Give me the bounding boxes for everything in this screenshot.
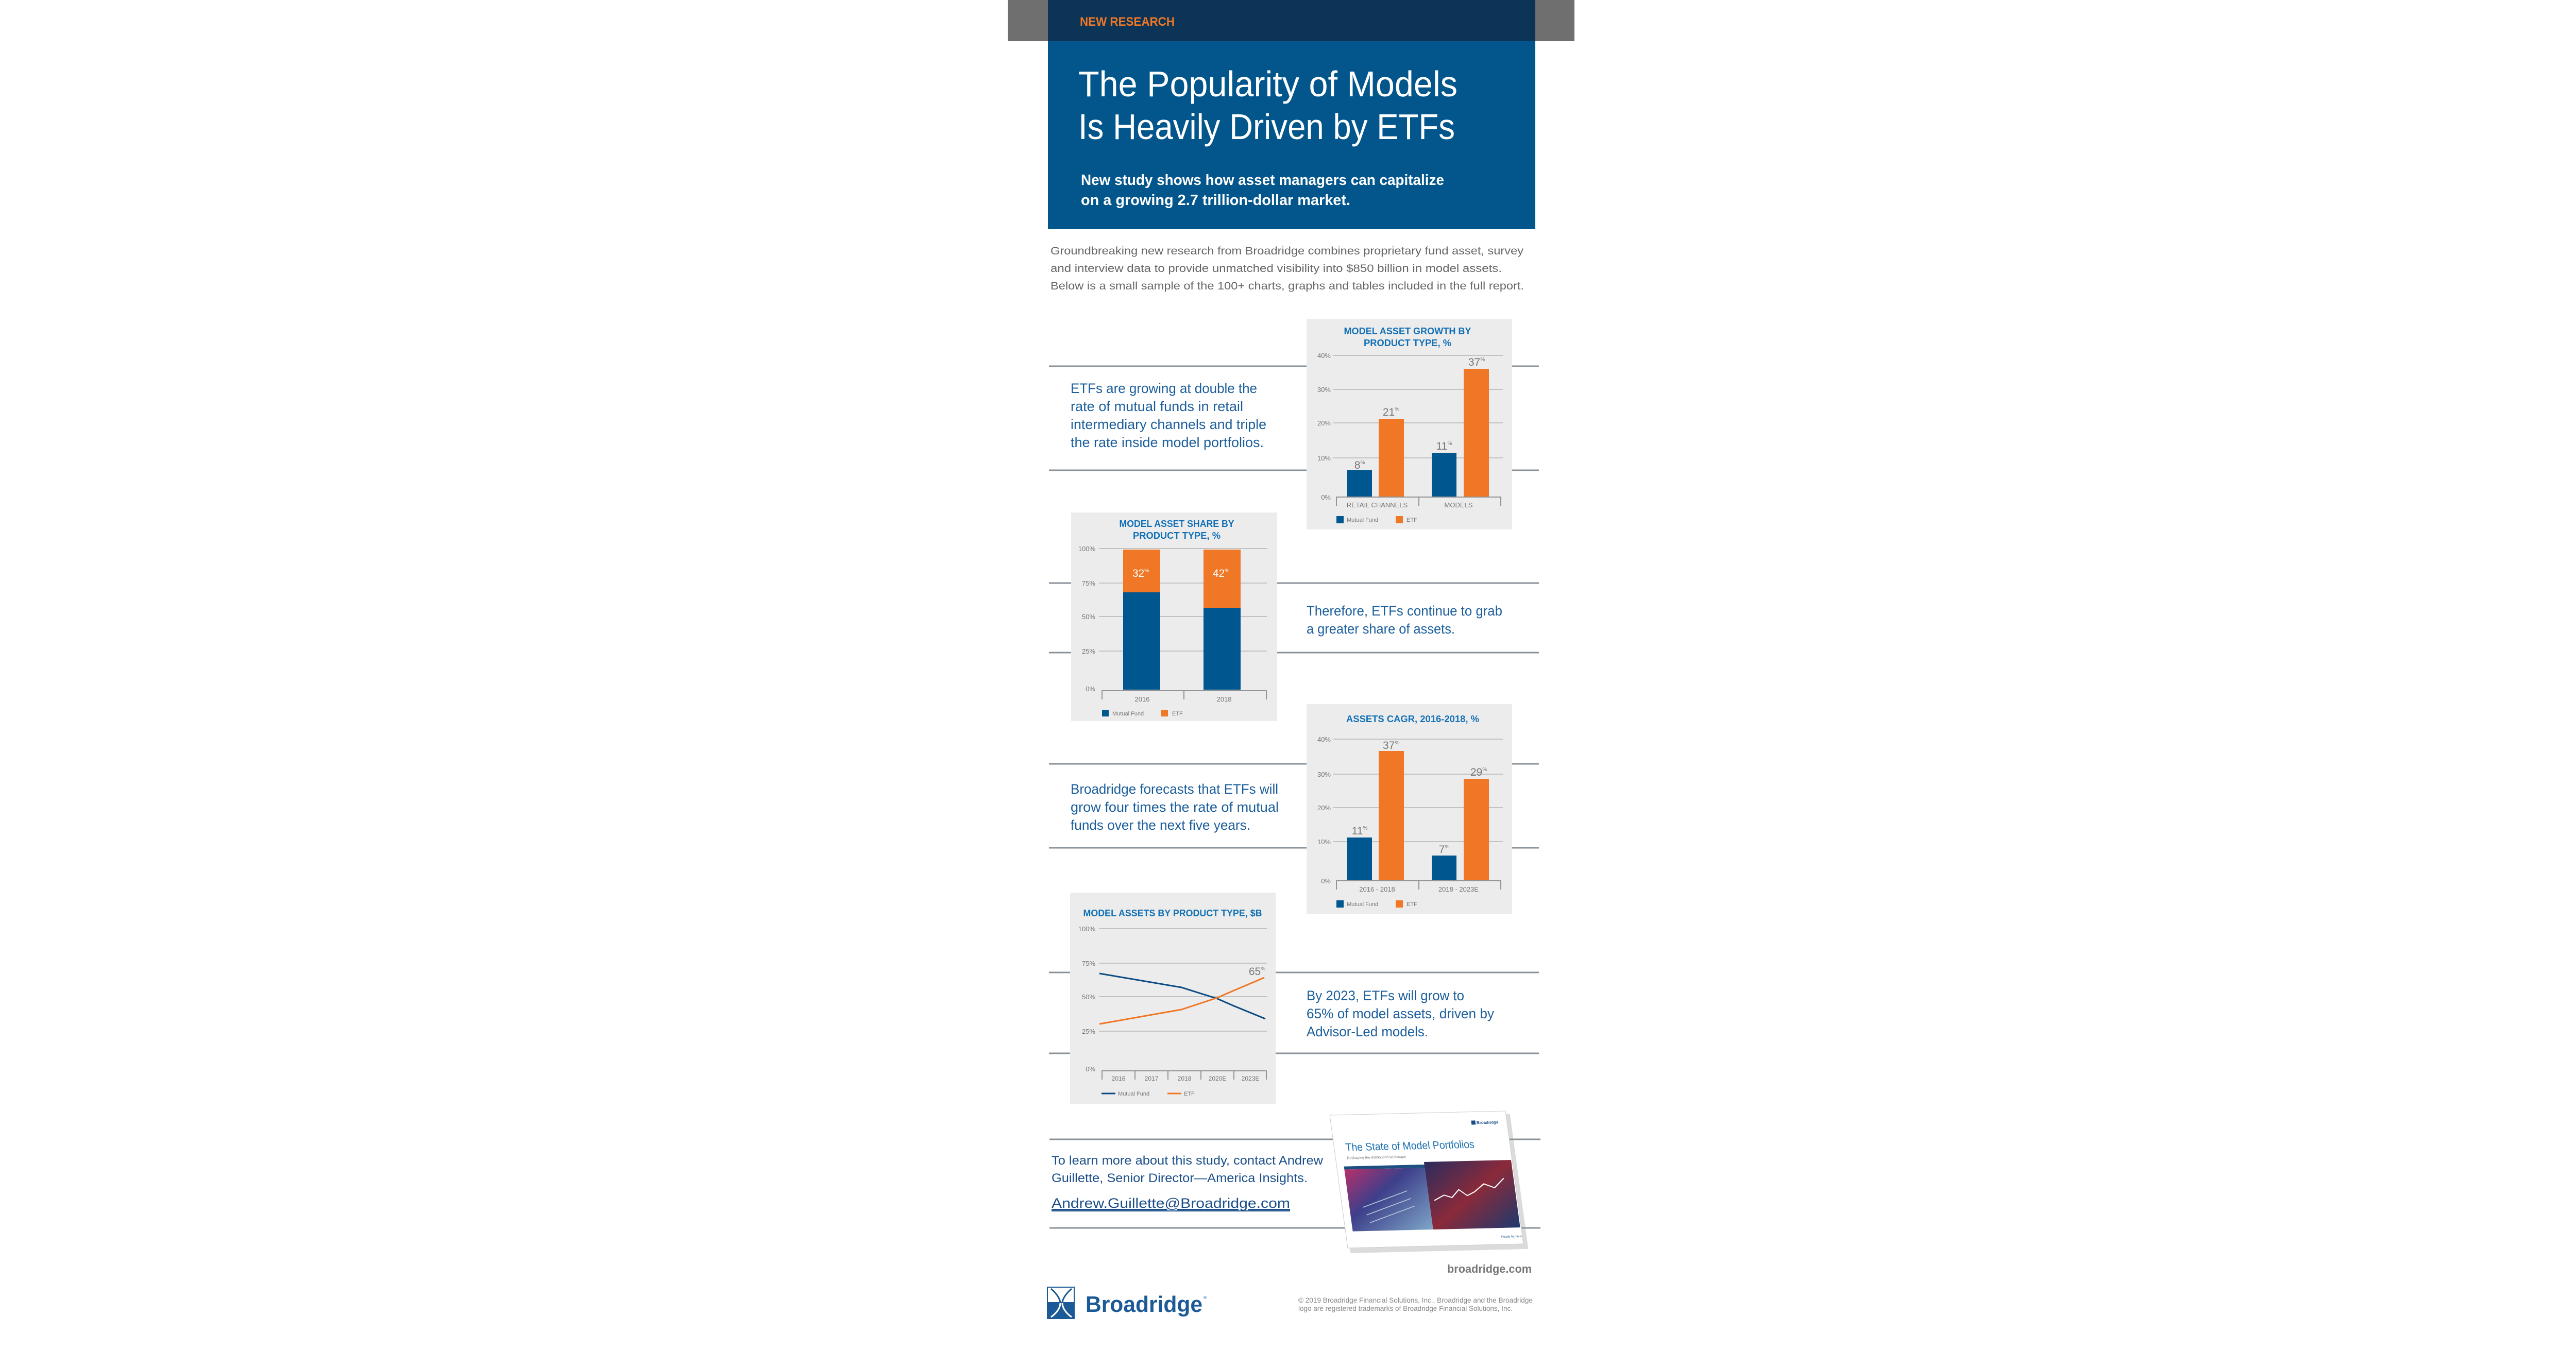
- chart: model asset growth: %: [1395, 407, 1399, 413]
- stacked bars: [1123, 550, 1241, 690]
- copyright: logo are registered trademarks of Broadridge Financial Solutions, Inc.: [1298, 1304, 1513, 1312]
- chart: model asset share: 50%: [1082, 613, 1095, 621]
- chart: model assets line: 2018: [1178, 1075, 1192, 1082]
- text: by 2023: [1307, 988, 1494, 1039]
- text: therefore: Therefore, ETFs continue to grab: [1307, 603, 1502, 619]
- chart: model asset share: 100%: [1078, 545, 1095, 553]
- title: Is Heavily Driven by ETFs: [1078, 107, 1455, 147]
- chart: model assets line: 50%: [1082, 993, 1095, 1001]
- chart title: [1344, 326, 1471, 348]
- chart title: MODEL ASSET GROWTH BY: [1344, 326, 1471, 336]
- legend: Mutual Fund: [1118, 1091, 1149, 1097]
- title panel: [1048, 41, 1535, 229]
- chart: model asset growth: RETAIL CHANNELS: [1347, 501, 1408, 509]
- chart title: PRODUCT TYPE, %: [1364, 338, 1451, 348]
- header bar: [1008, 0, 1574, 41]
- chart title: ASSETS CAGR, 2016-2018, %: [1346, 714, 1479, 724]
- lines: [1099, 973, 1265, 1024]
- chart: model asset share: 32: [1132, 568, 1144, 579]
- chart: model asset growth: MODELS: [1445, 501, 1473, 509]
- chart: assets cagr: %: [1445, 844, 1449, 850]
- text: ETFs growing: the rate inside model portfolios.: [1071, 435, 1264, 450]
- contact text: To learn more about this study, contact Andrew: [1052, 1154, 1324, 1168]
- chart: model assets line: 25%: [1082, 1028, 1095, 1035]
- legend: Mutual Fund: [1112, 711, 1144, 717]
- chart: model asset growth: 10%: [1317, 454, 1331, 462]
- chart title: [1119, 519, 1234, 541]
- chart: assets cagr: 2016 - 2018: [1359, 885, 1395, 893]
- chart: model assets line: 2023E: [1242, 1075, 1259, 1082]
- intro paragraph: [1050, 245, 1524, 292]
- legend: Mutual Fund: [1347, 901, 1378, 908]
- report cover image: Reshaping the distribution landscape: [1347, 1155, 1406, 1160]
- chart title: MODEL ASSETS BY PRODUCT TYPE, $B: [1083, 908, 1262, 918]
- intro paragraph: and interview data to provide unmatched visibility into $850 billion in model assets.: [1050, 263, 1502, 275]
- chart: model asset growth: %: [1447, 441, 1452, 447]
- legend: [1336, 516, 1417, 523]
- chart: model asset growth: 8: [1354, 459, 1360, 471]
- chart: model asset share: 42: [1213, 568, 1225, 579]
- report cover image: Broadridge: [1476, 1120, 1499, 1125]
- chart: assets cagr: 40%: [1317, 736, 1331, 743]
- chart: model asset growth: %: [1360, 460, 1365, 466]
- report cover image: [1330, 1111, 1528, 1253]
- contact text: [1052, 1154, 1324, 1211]
- chart: model asset share: %: [1225, 568, 1229, 574]
- chart: model asset growth: [1307, 319, 1512, 529]
- chart: model asset growth: 37: [1468, 356, 1480, 368]
- intro paragraph: Groundbreaking new research from Broadridge combines proprietary fund asset, survey: [1050, 245, 1524, 257]
- text: forecasts: funds over the next five years.: [1071, 817, 1250, 833]
- chart: model assets line: %: [1261, 966, 1265, 972]
- text: forecasts: [1071, 781, 1279, 833]
- legend: [1336, 900, 1417, 908]
- chart: model asset growth: 30%: [1317, 386, 1331, 394]
- subtitle: on a growing 2.7 trillion-dollar market.: [1081, 192, 1350, 209]
- legend: [1102, 710, 1183, 717]
- chart: model asset growth: 21: [1383, 406, 1395, 418]
- chart: assets cagr: 7: [1439, 844, 1445, 856]
- legend: ETF: [1184, 1091, 1195, 1097]
- text: therefore: [1307, 603, 1502, 637]
- chart: model asset share: 0%: [1086, 685, 1095, 693]
- text: forecasts: grow four times the rate of mutual: [1071, 799, 1279, 815]
- chart title: PRODUCT TYPE, %: [1133, 531, 1221, 541]
- email: Andrew.Guillette@Broadridge.com: [1052, 1195, 1290, 1211]
- chart: assets cagr: 29: [1470, 766, 1482, 778]
- report cover image: The State of Model Portfolios: [1345, 1139, 1475, 1153]
- logo: broadridge: ®: [1204, 1295, 1207, 1300]
- chart: model asset growth: 40%: [1317, 352, 1331, 360]
- chart: model assets line: [1070, 893, 1276, 1104]
- logo: broadridge: [1047, 1287, 1207, 1319]
- chart: model asset share: %: [1144, 568, 1149, 574]
- chart: model assets line: 2020E: [1209, 1075, 1226, 1082]
- title: [1078, 64, 1458, 147]
- chart title: MODEL ASSET SHARE BY: [1119, 519, 1234, 529]
- chart: assets cagr: 10%: [1317, 838, 1331, 846]
- chart: assets cagr: 11: [1352, 825, 1363, 837]
- chart: model asset growth: 11: [1436, 440, 1447, 452]
- chart: model asset growth: 0%: [1321, 493, 1331, 501]
- legend: [1101, 1091, 1195, 1097]
- chart: model assets line: 65: [1249, 966, 1261, 978]
- text: by 2023: 65% of model assets, driven by: [1307, 1006, 1494, 1021]
- chart: assets cagr: %: [1395, 740, 1399, 746]
- chart: assets cagr: %: [1363, 826, 1367, 831]
- chart: model asset share: [1071, 512, 1277, 721]
- legend: ETF: [1406, 901, 1417, 908]
- chart: model asset share: 2016: [1135, 695, 1149, 703]
- chart: model assets line: 75%: [1082, 960, 1095, 967]
- chart: model assets line: 2017: [1145, 1075, 1159, 1082]
- chart: assets cagr: 2018 - 2023E: [1438, 885, 1479, 893]
- bars: [1347, 751, 1489, 880]
- chart: model assets line: 2016: [1112, 1075, 1126, 1082]
- bars: [1347, 369, 1489, 497]
- logo: broadridge: Broadridge: [1086, 1292, 1202, 1317]
- contact text: Guillette, Senior Director—America Insights.: [1052, 1171, 1308, 1185]
- website: broadridge.com: [1447, 1262, 1532, 1275]
- chart: assets cagr: %: [1482, 767, 1487, 773]
- copyright: © 2019 Broadridge Financial Solutions, Inc., Broadridge and the Broadridge: [1298, 1296, 1533, 1304]
- chart: model assets line: 0%: [1086, 1065, 1095, 1073]
- copyright: [1298, 1296, 1533, 1312]
- legend: ETF: [1406, 517, 1417, 523]
- chart: assets cagr: 0%: [1321, 877, 1331, 885]
- report cover image: Ready for Next: [1501, 1235, 1522, 1239]
- text: by 2023: Advisor-Led models.: [1307, 1024, 1428, 1039]
- text: ETFs growing: rate of mutual funds in retail: [1071, 399, 1243, 414]
- legend: Mutual Fund: [1347, 517, 1378, 523]
- title: The Popularity of Models: [1078, 64, 1458, 104]
- chart: model assets line: 100%: [1078, 925, 1095, 933]
- chart: assets cagr: 30%: [1317, 771, 1331, 778]
- text: by 2023: By 2023, ETFs will grow to: [1307, 988, 1464, 1003]
- chart: model asset growth: 20%: [1317, 419, 1331, 427]
- chart: model asset share: 25%: [1082, 647, 1095, 655]
- label: new research: NEW RESEARCH: [1080, 15, 1175, 29]
- text: ETFs growing: ETFs are growing at double the: [1071, 381, 1257, 396]
- subtitle: New study shows how asset managers can capitalize: [1081, 172, 1444, 189]
- subtitle: [1081, 172, 1444, 209]
- intro paragraph: Below is a small sample of the 100+ charts, graphs and tables included in the full report.: [1050, 280, 1524, 292]
- chart: assets cagr: 20%: [1317, 804, 1331, 812]
- text: therefore: a greater share of assets.: [1307, 621, 1455, 637]
- text: forecasts: Broadridge forecasts that ETFs will: [1071, 781, 1278, 797]
- chart: model asset share: 75%: [1082, 579, 1095, 587]
- text: ETFs growing: intermediary channels and triple: [1071, 417, 1266, 432]
- chart: model asset share: 2018: [1217, 695, 1231, 703]
- chart: assets cagr: 37: [1383, 740, 1395, 751]
- chart: assets cagr: [1307, 704, 1512, 914]
- chart: model asset growth: %: [1480, 357, 1485, 363]
- text: ETFs growing: [1071, 381, 1266, 450]
- legend: ETF: [1172, 711, 1183, 717]
